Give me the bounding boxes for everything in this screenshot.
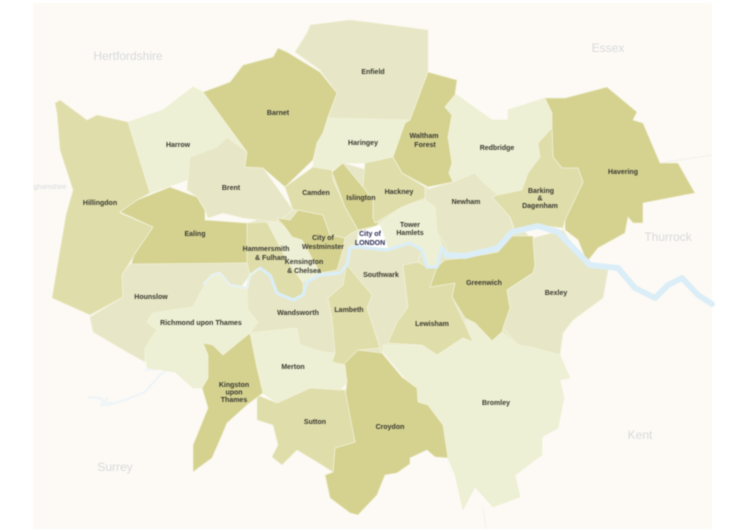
label: Greenwich: Greenwich [466,280,502,287]
central land base [247,163,560,365]
label: Islington: Islington [346,195,376,202]
label: Hounslow: Hounslow [134,294,168,301]
borough: Lambeth [328,250,380,365]
label: Croydon: Croydon [376,424,404,431]
label: Bexley: Bexley [545,290,567,297]
label: Kensington and Chelsea: Kensington [285,259,323,266]
faint county boundaries [483,155,712,529]
borough: Brent [187,137,293,222]
label: Southwark: Southwark [363,272,399,279]
label: Essex: Essex [592,41,624,55]
label: Kingston upon Thames: upon [225,390,243,396]
label: Hackney: Hackney [385,189,414,196]
borough: Harrow [128,87,247,193]
borough: Tower Hamlets [377,200,443,267]
label: Lewisham: Lewisham [415,321,449,328]
label: Camden: Camden [302,190,330,197]
borough: Lewisham [388,262,473,355]
River Thames, estuary [446,226,712,304]
borough: Hammersmith and Fulham [247,222,303,300]
label: City of London: City of [359,231,382,238]
label: Hammersmith and Fulham: Hammersmith [243,246,289,253]
borough: Croydon [325,350,448,515]
label: Tower Hamlets: Tower [400,222,420,229]
label: Sutton: Sutton [304,419,326,426]
label: Hillingdon: Hillingdon [83,200,117,207]
label: Barnet: Barnet [267,110,290,117]
borough: Kensington and Chelsea [267,222,320,283]
borough: City of Westminster [277,210,345,273]
label: Kingston upon Thames: Kingston [219,382,249,389]
label: Redbridge: Redbridge [480,145,514,152]
label: Richmond upon Thames: Richmond upon Thames [160,320,242,327]
River Thames, upper reach [204,268,260,288]
borough: Haringey [313,118,410,170]
label: Hammersmith and Fulham: & Fulham [255,255,287,262]
label: Kensington and Chelsea: & Chelsea [287,268,321,275]
borough: Barking and Dagenham [492,128,583,230]
label: Harrow: Harrow [166,142,191,149]
borough: Richmond upon Thames [145,273,258,388]
label: City of Westminster: Westminster [302,244,344,251]
label: Thurrock: Thurrock [644,230,693,244]
label: Brent: Brent [222,185,241,192]
label: Buckinghamshire cut off: ghamshire [34,184,66,191]
label: Surrey: Surrey [97,460,133,474]
label: Haringey: Haringey [348,140,378,147]
borough: Redbridge [445,95,552,195]
borough: Enfield [295,20,428,120]
label: Lambeth: Lambeth [334,307,364,314]
label: City of Westminster: City of [312,235,335,242]
label: Newham: Newham [452,199,480,206]
borough: Havering [545,87,695,262]
borough: Hounslow [90,263,250,362]
River Thames, central reach [260,243,448,300]
borough: Waltham Forest [393,72,457,187]
label: Kingston upon Thames: Thames [221,397,247,404]
label: Barking and Dagenham: Dagenham [522,203,558,210]
borough: Barnet [203,48,337,187]
label: Merton: Merton [281,364,305,371]
label: Kent: Kent [628,428,653,442]
label: Havering: Havering [608,169,638,176]
borough labels [83,69,638,431]
borough: Sutton [257,388,355,472]
label: Barking and Dagenham: & [537,196,543,202]
borough: Wandsworth [247,265,347,353]
borough: Islington [332,163,380,230]
label: Hertfordshire: Hertfordshire [93,49,163,63]
borough: Greenwich [430,236,535,341]
borough: Hillingdon [52,100,153,315]
label: Enfield: Enfield [361,69,385,76]
borough: Bromley [383,320,570,510]
label: Waltham Forest: Forest [414,142,436,149]
label: Ealing: Ealing [184,231,206,238]
river tributary and reservoir in Surrey [88,368,170,406]
label: Tower Hamlets: Hamlets [396,230,424,237]
borough: Bexley [503,230,608,355]
county labels [34,41,693,474]
borough: City of London [357,225,388,248]
borough: Newham [425,173,513,253]
borough: Camden [285,167,358,238]
borough: Hackney [363,157,425,223]
borough: Merton [250,328,347,403]
borough: Kingston upon Thames [193,333,263,472]
label: Bromley: Bromley [482,400,510,407]
label: Waltham Forest: Waltham [410,133,438,140]
label: City of London: LONDON [355,240,385,247]
borough: Ealing [120,187,248,265]
label: Barking and Dagenham: Barking [528,188,554,195]
label: Wandsworth: Wandsworth [277,310,319,317]
borough: Southwark [347,243,422,353]
